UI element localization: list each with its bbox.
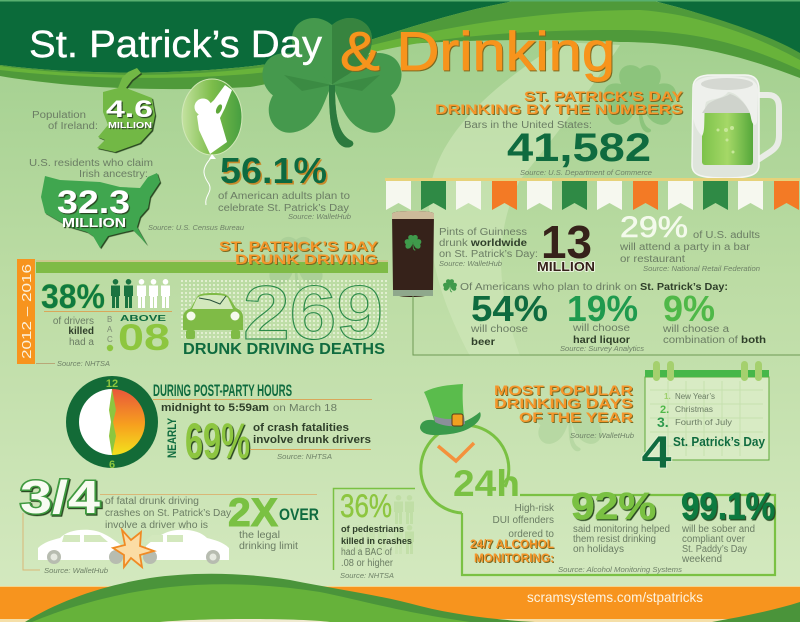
24h label: 24h [453, 463, 520, 504]
3/4 crashes stat: crashes on St. Patrick’s Day [105, 508, 231, 519]
29% party stat: will attend a party in a bar [619, 242, 751, 253]
19% liquor: hard liquor [573, 335, 630, 346]
2X over [228, 491, 319, 552]
54% beer [470, 288, 548, 348]
adults celebrating stat [182, 79, 351, 221]
19% liquor: 19% [567, 288, 638, 329]
54% beer: 54% [471, 288, 548, 329]
92% stat: said monitoring helped [573, 524, 670, 535]
ranking list [641, 392, 766, 478]
Guinness stat: MILLION [537, 260, 595, 274]
panel: 24/7 alcohol monitoring: DUI offenders [492, 515, 554, 526]
Guinness stat [439, 216, 595, 274]
heading: most popular drinking days: MOST POPULAR [494, 383, 633, 398]
2X over: the legal [239, 530, 280, 541]
13 million value: 13 [541, 216, 592, 268]
people icons [111, 279, 170, 308]
post-party hours stat: involve drunk drivers [253, 434, 371, 446]
faint clover behind numbers heading [602, 65, 678, 133]
41,582 value: 41,582 [507, 126, 651, 170]
ranking list: 1. [664, 392, 671, 401]
year tab: 2012 – 2016 [19, 264, 34, 359]
panel: what Americans drink: Source: Survey Analytics [560, 346, 645, 353]
Guinness stat: Source: WalletHub [439, 261, 502, 268]
panel: 24/7 alcohol monitoring: Source: Alcohol Monitoring Systems [558, 567, 683, 574]
92% stat: on holidays [573, 544, 624, 555]
69% description: of crash fatalities [253, 422, 349, 434]
bars in the US: Source: U.S. Department of Commerce [520, 170, 652, 177]
Guinness stat: drunk worldwide [439, 238, 527, 249]
heading: drunk driving: DRUNK DRIVING [235, 252, 378, 267]
bars in the US: Bars in the United States: [464, 120, 592, 131]
ranking list: St. Patrick’s Day [673, 434, 766, 449]
title: St. Patrick’s Day [29, 24, 322, 66]
title: & Drinking [340, 20, 615, 82]
3/4 crashes stat: Source: WalletHub [44, 568, 108, 575]
post-party hours stat [153, 381, 372, 469]
icon: clock hands [438, 443, 474, 461]
99.1% stat: 99.1% [681, 486, 775, 528]
panel: 36% pedestrians: killed in crashes [341, 536, 412, 547]
Ireland label: Population [32, 110, 86, 121]
38% value: 38% [41, 278, 105, 316]
calendar rings [653, 361, 762, 381]
19% liquor [567, 288, 638, 346]
2X over: drinking limit [239, 541, 298, 552]
92% stat [571, 486, 670, 555]
heading: most popular drinking days: OF THE YEAR [519, 410, 633, 425]
header band [0, 0, 800, 89]
heading: drinking by the numbers [435, 89, 683, 117]
icon: US map [41, 173, 160, 248]
BAC above .08: A [107, 325, 113, 334]
icon: balloon with drinker [182, 79, 242, 205]
bunting banner [385, 178, 800, 210]
title [29, 20, 615, 82]
icon: large shamrock [259, 18, 405, 148]
faint clover behind drunk driving heading [265, 237, 327, 291]
9% both: will choose a [662, 324, 729, 335]
99.1% stat: will be sober and [681, 524, 755, 535]
icon: Ireland map [97, 68, 155, 152]
pale pedestrian pattern [342, 495, 414, 554]
2X over: 2X [228, 491, 278, 535]
heading: most popular drinking days [494, 383, 634, 440]
panel: drunk driving 2012-2016 [17, 259, 388, 368]
panel: 24/7 alcohol monitoring: ordered to [508, 529, 554, 540]
Ireland value: 4.6 [106, 96, 153, 123]
ranking list: Christmas [675, 405, 713, 414]
heading: drinking by the numbers: DRINKING BY THE NUMBERS [435, 102, 683, 117]
footer URL: scramsystems.com/stpatricks [527, 589, 703, 605]
drivers killed label: of drivers [53, 316, 94, 327]
56.1% description: of American adults plan to [218, 191, 350, 202]
3/4 crashes stat [20, 471, 319, 575]
icon: colliding cars [38, 530, 229, 567]
99.1% stat [681, 486, 775, 565]
BAC above .08: B [107, 315, 112, 324]
56.1% value: 56.1% [220, 150, 327, 191]
US Irish ancestry: MILLION [62, 215, 126, 230]
heading: drinking by the numbers: ST. PATRICK’S DAY [524, 89, 683, 104]
year tab [17, 259, 35, 364]
99.1% stat: compliant over [682, 534, 746, 545]
heading: most popular drinking days: Source: WalletHub [570, 433, 634, 440]
icon: leprechaun hat [420, 384, 481, 435]
heading: drunk driving: ST. PATRICK’S DAY [219, 239, 378, 254]
panel: what Americans drink [413, 279, 800, 355]
9% both: combination of both [663, 335, 766, 346]
3/4 crashes stat: involve a driver who is [105, 520, 208, 531]
panel: drunk driving 2012-2016: had a [69, 337, 94, 348]
icon: beer mug [692, 75, 779, 178]
ranking list: Fourth of July [675, 418, 732, 427]
36% value: 36% [340, 488, 392, 524]
monitoring description: High-risk [515, 503, 555, 514]
bars in the US [464, 120, 652, 177]
3/4 value: 3/4 [20, 471, 101, 523]
ancestry value: 32.3 [57, 184, 130, 220]
panel: what Americans drink: St. Patrick’s Day: [640, 282, 728, 293]
BAC above .08: ABOVE [120, 314, 167, 323]
panel: drunk driving 2012-2016: killed [68, 326, 94, 337]
BAC above .08: 08 [118, 317, 170, 358]
9% both: 9% [663, 288, 715, 329]
92% stat: 92% [571, 486, 656, 528]
ranking list: 4 [641, 426, 672, 478]
19% liquor: will choose [572, 323, 630, 334]
heading: drunk driving [219, 239, 378, 267]
population of Ireland [32, 68, 155, 152]
deaths label: DRUNK DRIVING DEATHS [183, 341, 385, 358]
99.1% stat: St. Paddy’s Day [682, 544, 747, 555]
99.1% stat: weekend [681, 554, 722, 565]
time range: midnight to 5:59am [161, 402, 269, 414]
36% description: of pedestrians [341, 524, 404, 535]
calendar [641, 361, 769, 478]
US Irish ancestry [29, 158, 244, 248]
monitoring clock and frame [421, 425, 509, 513]
Guinness stat: on St. Patrick’s Day: [439, 249, 538, 260]
ancestry label: U.S. residents who claim [29, 158, 153, 169]
nearly label: NEARLY [165, 418, 179, 458]
92% stat: them resist drinking [573, 534, 656, 545]
29% party stat [619, 211, 760, 273]
heading: most popular drinking days: DRINKING DAYS [494, 396, 633, 411]
29% party stat: of U.S. adults [693, 230, 760, 241]
54% beer: will choose [470, 324, 528, 335]
29% party stat: or restaurant [620, 254, 685, 265]
dotted pattern [181, 281, 387, 337]
post-party hours stat: Source: NHTSA [277, 454, 332, 461]
adults celebrating stat: Source: WalletHub [288, 214, 351, 221]
panel: 24/7 alcohol monitoring: MONITORING: [474, 551, 554, 565]
post-party hours stat: DURING POST-PARTY HOURS [153, 381, 292, 400]
icon: post-party clock [66, 376, 158, 471]
panel: 36% pedestrians: Source: NHTSA [340, 573, 394, 580]
54% beer: beer [471, 337, 495, 348]
drink question: Of Americans who plan to drink on [460, 282, 637, 293]
panel: 24/7 alcohol monitoring [420, 384, 775, 575]
panel: 36% pedestrians [334, 488, 415, 580]
calendar grid [650, 381, 763, 456]
69% value: 69% [185, 413, 250, 469]
9% both [662, 288, 766, 346]
footer band [0, 574, 800, 622]
ranking list: 3. [657, 414, 669, 430]
29% party stat: 29% [620, 211, 688, 244]
icon: post-party clock: 6 [109, 459, 115, 471]
ranking list: 2. [660, 404, 669, 416]
29% party stat: Source: National Retail Federation [643, 266, 760, 273]
ranking list: New Year’s [675, 392, 715, 401]
panel: 36% pedestrians: .08 or higher [341, 558, 394, 569]
background pale glow shape [429, 42, 620, 356]
icon: post-party clock: 12 [106, 378, 118, 390]
3/4 description: of fatal drunk driving [105, 496, 199, 507]
panel: 36% pedestrians: had a BAC of [341, 547, 392, 558]
icon: pint of Guinness [392, 211, 434, 297]
adults celebrating stat: celebrate St. Patrick’s Day [218, 203, 349, 214]
panel: drunk driving 2012-2016: Source: NHTSA [57, 361, 110, 368]
2X over: OVER [279, 505, 319, 524]
panel: 24/7 alcohol monitoring: 24/7 ALCOHOL [470, 537, 554, 551]
faint clover behind popular days heading [534, 386, 606, 451]
icon: crashed car [183, 293, 243, 339]
BAC above .08: C [107, 335, 113, 344]
US Irish ancestry: Irish ancestry: [79, 169, 148, 180]
BAC above .08 [107, 314, 170, 358]
269 outlined number: 269 [243, 271, 383, 356]
icon: small shamrock [443, 279, 457, 292]
post-party hours stat: on March 18 [273, 403, 337, 414]
Guinness stat: Pints of Guinness [439, 227, 527, 238]
population of Ireland: of Ireland: [48, 121, 98, 132]
US Irish ancestry: Source: U.S. Census Bureau [148, 225, 244, 232]
population of Ireland: MILLION [108, 120, 152, 130]
